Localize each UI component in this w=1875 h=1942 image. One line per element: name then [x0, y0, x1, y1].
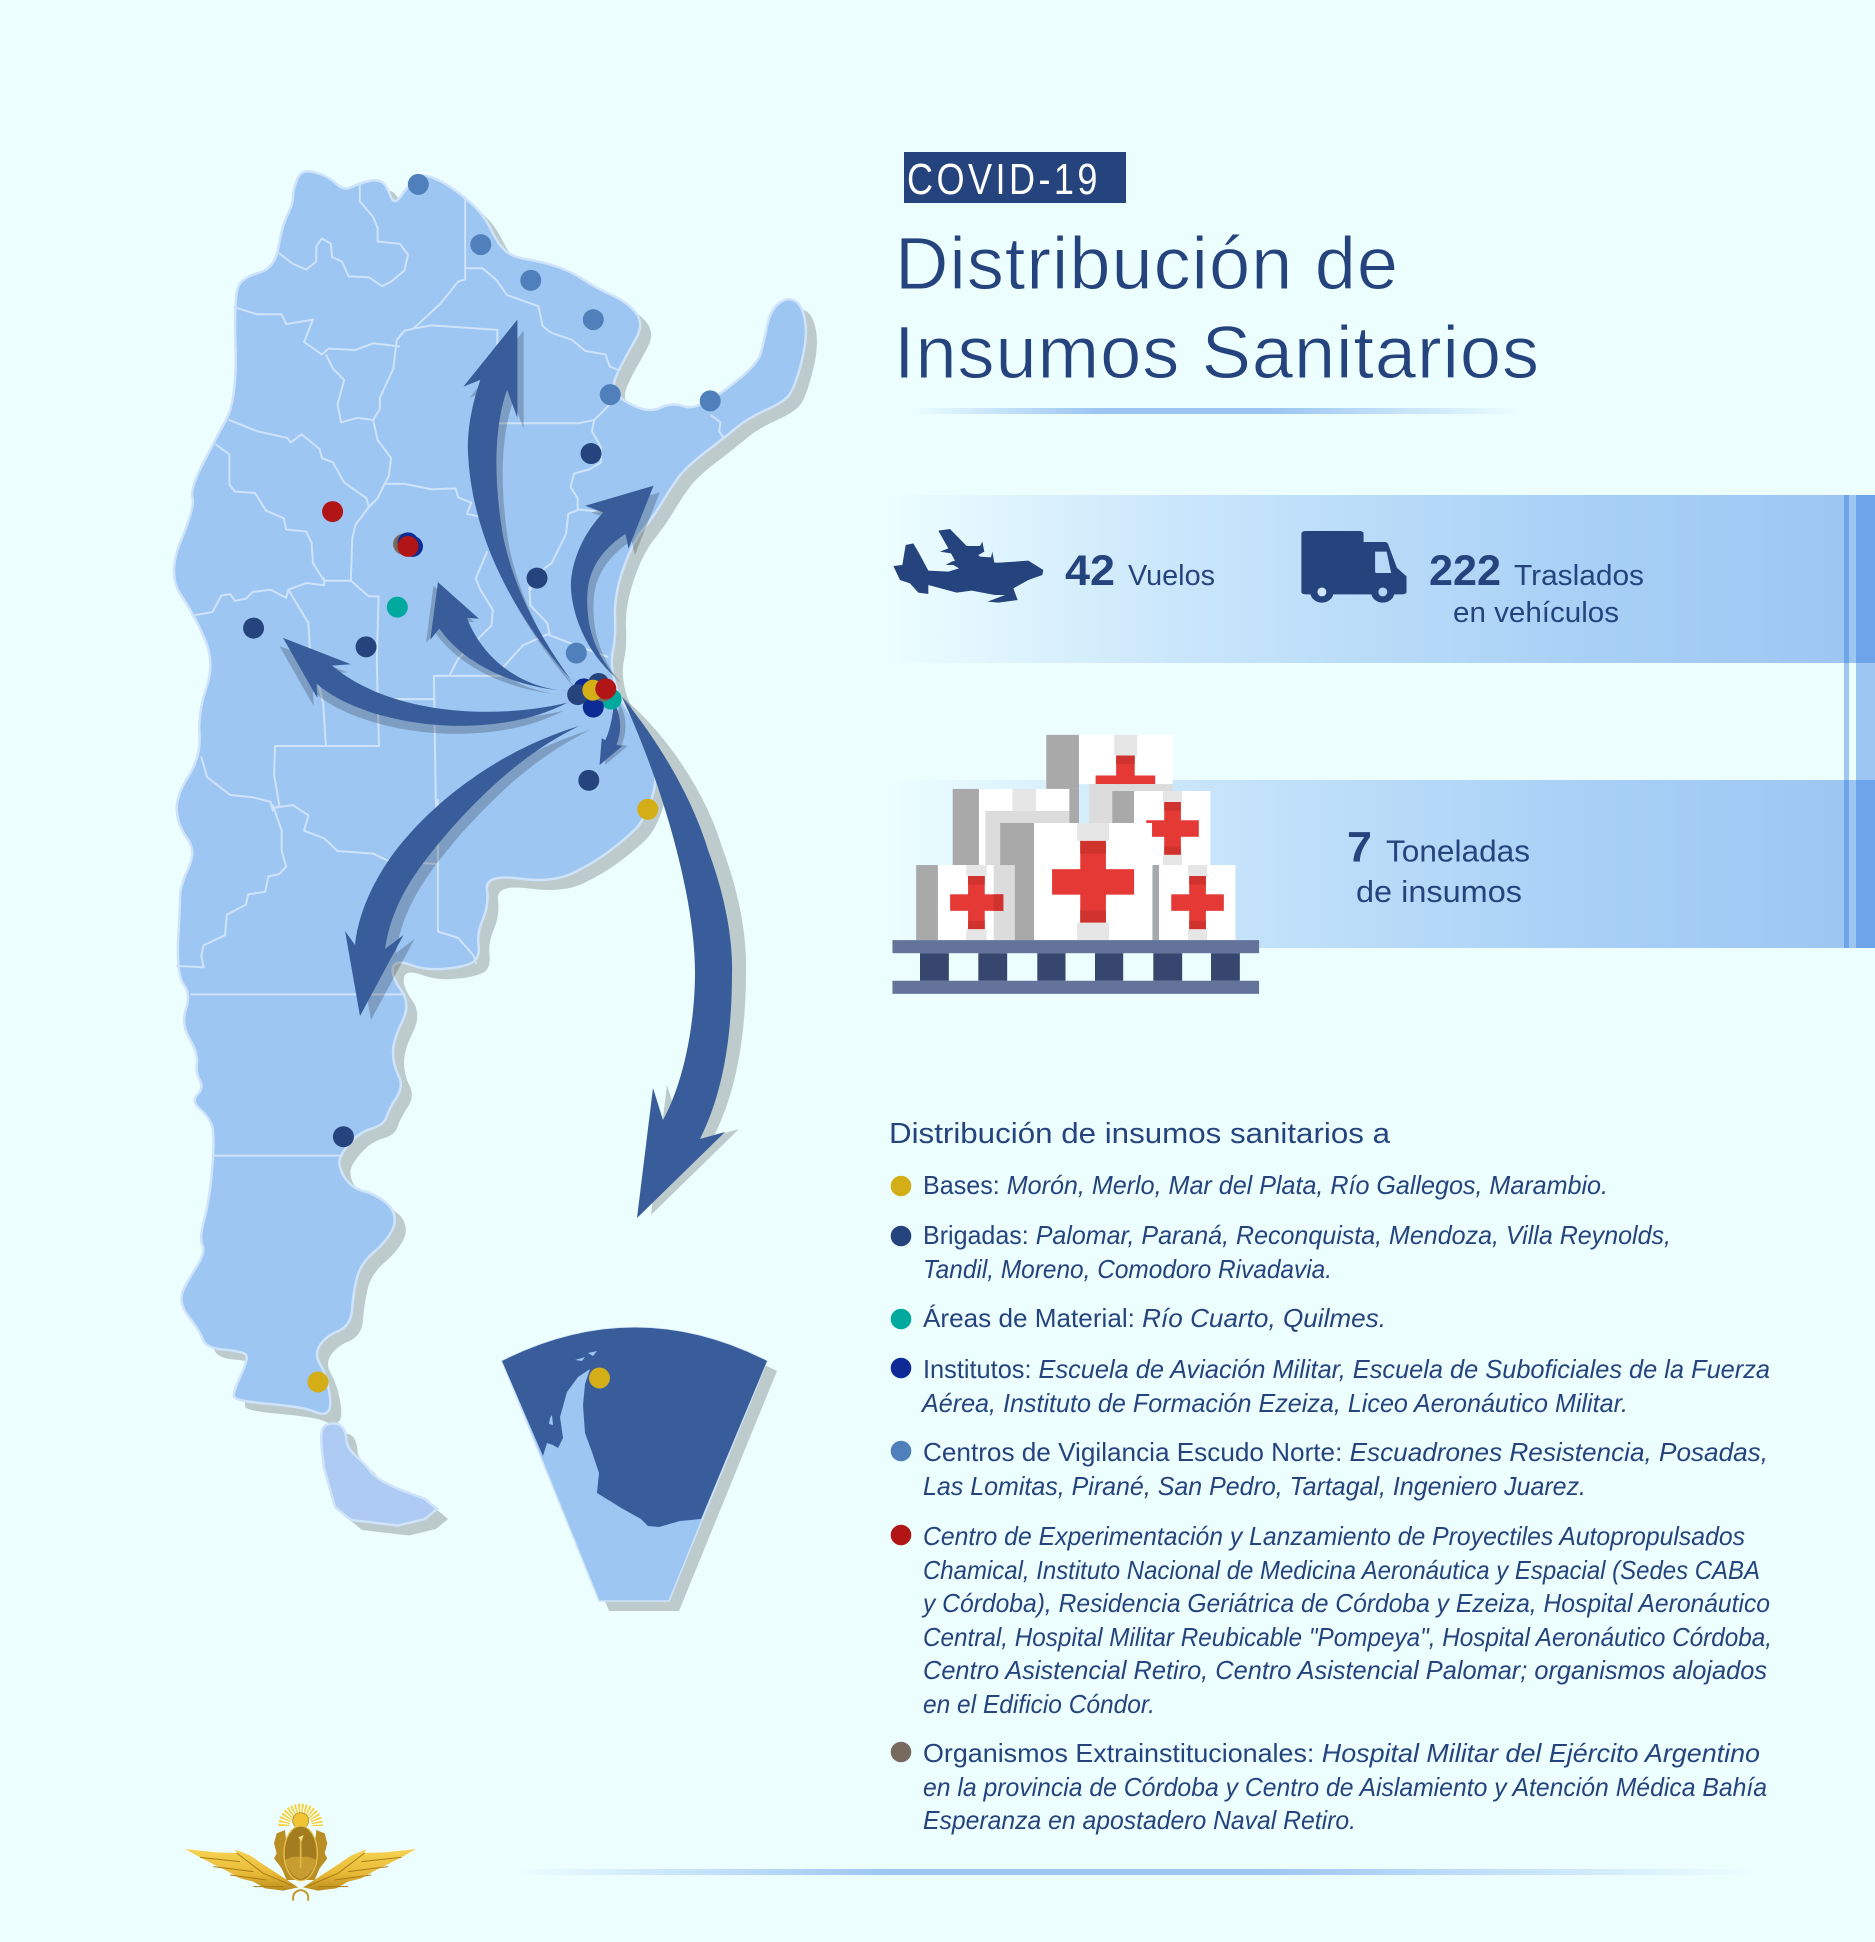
title underline — [910, 408, 1520, 414]
stat: 7 Toneladas de insumos: Toneladas — [1386, 834, 1530, 868]
dots: Córdoba cluster — [393, 532, 423, 557]
stat: 7 Toneladas de insumos — [1347, 824, 1530, 909]
arrow: northwest — [430, 582, 567, 691]
legend item: Centro de Experimentación: y Córdoba), Residencia Geriátrica de Córdoba y Ezeiza, Hospital Aeronáutico — [921, 1588, 1770, 1618]
Antarctica sector map — [502, 1328, 777, 1611]
stat band: tonnes — [885, 780, 1844, 948]
title — [894, 222, 1539, 394]
stat: 7 Toneladas de insumos: de insumos — [1356, 874, 1522, 909]
legend item: Centro de Experimentación: Centro de Experimentación y Lanzamiento de Proyectiles Autopropulsados — [923, 1521, 1745, 1551]
legend item: Áreas de Material: Áreas de Material: Río Cuarto, Quilmes. — [923, 1303, 1386, 1333]
emblem: sun — [293, 1813, 309, 1829]
arrow: short south — [600, 704, 622, 765]
icon: truck — [1301, 531, 1407, 603]
dots: Brigadas — [243, 443, 602, 791]
legend item: Organismos Extrainstitucionales: Esperanza en apostadero Naval Retiro. — [923, 1805, 1356, 1835]
legend heading: Distribución de insumos sanitarios a — [889, 1118, 1391, 1150]
arrow: west — [283, 638, 567, 726]
band background — [885, 780, 1844, 948]
legend item: Centro de Experimentación: Centro Asistencial Retiro, Centro Asistencial Palomar; organismos alojados — [923, 1655, 1767, 1685]
dots: Escudo Norte centres — [408, 174, 721, 664]
map location dots — [243, 174, 721, 1392]
box: right upper — [1089, 784, 1210, 865]
stat: 42 Vuelos: Vuelos — [1128, 560, 1215, 592]
icon: airplane — [893, 529, 1043, 603]
dots: Buenos Aires cluster — [567, 673, 622, 718]
dot: Río Gallegos — [308, 1372, 328, 1392]
title: Insumos Sanitarios — [894, 311, 1539, 394]
emblem: bow — [293, 1890, 308, 1901]
bottom divider — [514, 1869, 1758, 1875]
stat: 42 Vuelos — [1065, 547, 1215, 595]
arrows group: north, northeast, northwest, west, short south — [279, 320, 660, 765]
sector shadow — [512, 1338, 777, 1611]
legend item: Brigadas: Tandil, Moreno, Comodoro Rivadavia. — [923, 1254, 1332, 1284]
emblem: shield — [284, 1826, 317, 1881]
legend item: Centros de Vigilancia: Centros de Vigilancia Escudo Norte: Escuadrones Resistencia, Posadas, — [923, 1437, 1768, 1467]
icon: medical boxes on pallet — [892, 735, 1259, 994]
legend item: Centro de Experimentación: Central, Hospital Militar Reubicable "Pompeya", Hospital Aeronáutico Córdoba, — [923, 1622, 1772, 1652]
box: left front — [916, 865, 1015, 940]
stat: 42 Vuelos: 42 — [1065, 547, 1115, 595]
arrow shadow: northwest — [426, 586, 563, 695]
box: left back — [953, 789, 1079, 865]
arrow shadow: northeast — [577, 492, 660, 683]
box: top — [1046, 735, 1173, 789]
dot: Chamical — [322, 501, 343, 522]
South Shetland islets — [549, 1351, 597, 1425]
province borders south — [177, 800, 476, 1156]
map shadow — [185, 181, 817, 1535]
stat: 222 Traslados en vehículos — [1429, 547, 1644, 629]
arrow shadow: south — [622, 697, 746, 1215]
arrow: southwest — [345, 726, 579, 1016]
arrow: northeast — [571, 486, 654, 677]
box: centre large — [1000, 823, 1152, 940]
map mainland — [174, 171, 806, 1414]
legend item: Institutos: Aérea, Instituto de Formación Ezeiza, Liceo Aeronáutico Militar. — [920, 1388, 1628, 1418]
emblem: Air Force wings and coat of arms — [185, 1809, 416, 1901]
legend: distribution list — [889, 1118, 1772, 1835]
Antarctica land mass — [502, 1328, 767, 1527]
emblem: laurel — [274, 1830, 327, 1880]
legend item: Bases: Bases: Morón, Merlo, Mar del Plata, Río Gallegos, Marambio. — [923, 1170, 1608, 1200]
legend item: Centro de Experimentación: Chamical, Instituto Nacional de Medicina Aeronáutica y Espacial (Sedes CABA — [923, 1555, 1760, 1585]
emblem: right wing — [303, 1849, 416, 1891]
box: right front — [1153, 865, 1235, 940]
stat band: flights and vehicles — [885, 495, 1844, 663]
stat: 7 Toneladas de insumos: 7 — [1347, 824, 1372, 872]
map Tierra del Fuego — [321, 1424, 437, 1526]
emblem: sun rays — [284, 1809, 317, 1826]
legend item: Centro de Experimentación — [891, 1521, 1772, 1719]
right edge stripes — [1844, 495, 1875, 948]
band background — [885, 495, 1844, 663]
legend item: Institutos: Institutos: Escuela de Aviación Militar, Escuela de Suboficiales de la Fuerza — [923, 1354, 1770, 1384]
arrow shadow: west — [279, 646, 564, 734]
arrow: south to Antarctica — [622, 697, 732, 1218]
map: Argentina — [174, 171, 817, 1535]
stat: 222 Traslados en vehículos: en vehículos — [1453, 597, 1619, 629]
legend item: Brigadas — [891, 1220, 1671, 1284]
legend item: Institutos — [891, 1354, 1770, 1418]
arrow: north — [463, 320, 572, 681]
legend item: Centros de Vigilancia — [891, 1437, 1768, 1501]
emblem: left wing — [185, 1849, 298, 1891]
legend item: Centros de Vigilancia: Las Lomitas, Pirané, San Pedro, Tartagal, Ingeniero Juarez. — [923, 1471, 1586, 1501]
pallet — [892, 940, 1259, 994]
sector base — [502, 1328, 767, 1601]
dots north and centre — [243, 174, 721, 820]
dot: Mar del Plata — [637, 799, 658, 820]
arrow shadow: short south — [605, 704, 628, 765]
province borders north — [192, 185, 724, 850]
legend item: Organismos Extrainstitucionales: en la provincia de Córdoba y Centro de Aislamiento y Atención Médica Bahía — [923, 1772, 1767, 1802]
legend item: Centro de Experimentación: en el Edificio Cóndor. — [923, 1689, 1155, 1719]
stat: 222 Traslados en vehículos: 222 — [1429, 547, 1501, 595]
legend item: Brigadas: Brigadas: Palomar, Paraná, Reconquista, Mendoza, Villa Reynolds, — [923, 1220, 1671, 1250]
arrow shadow: southwest — [356, 730, 590, 1020]
arrow shadow: north — [470, 331, 578, 692]
dot: Comodoro Rivadavia — [333, 1126, 354, 1147]
dot: Marambio — [589, 1368, 610, 1388]
dot: Río Cuarto — [387, 597, 408, 618]
stat: 222 Traslados en vehículos: Traslados — [1514, 560, 1644, 592]
arrows from Buenos Aires — [279, 320, 746, 1218]
legend item: Organismos Extrainstitucionales — [891, 1738, 1767, 1835]
title: Distribución de — [895, 222, 1398, 305]
tag: COVID-19: COVID-19 — [907, 155, 1101, 204]
legend item: Organismos Extrainstitucionales: Organismos Extrainstitucionales: Hospital Militar del Ejército Argentino — [923, 1738, 1760, 1768]
